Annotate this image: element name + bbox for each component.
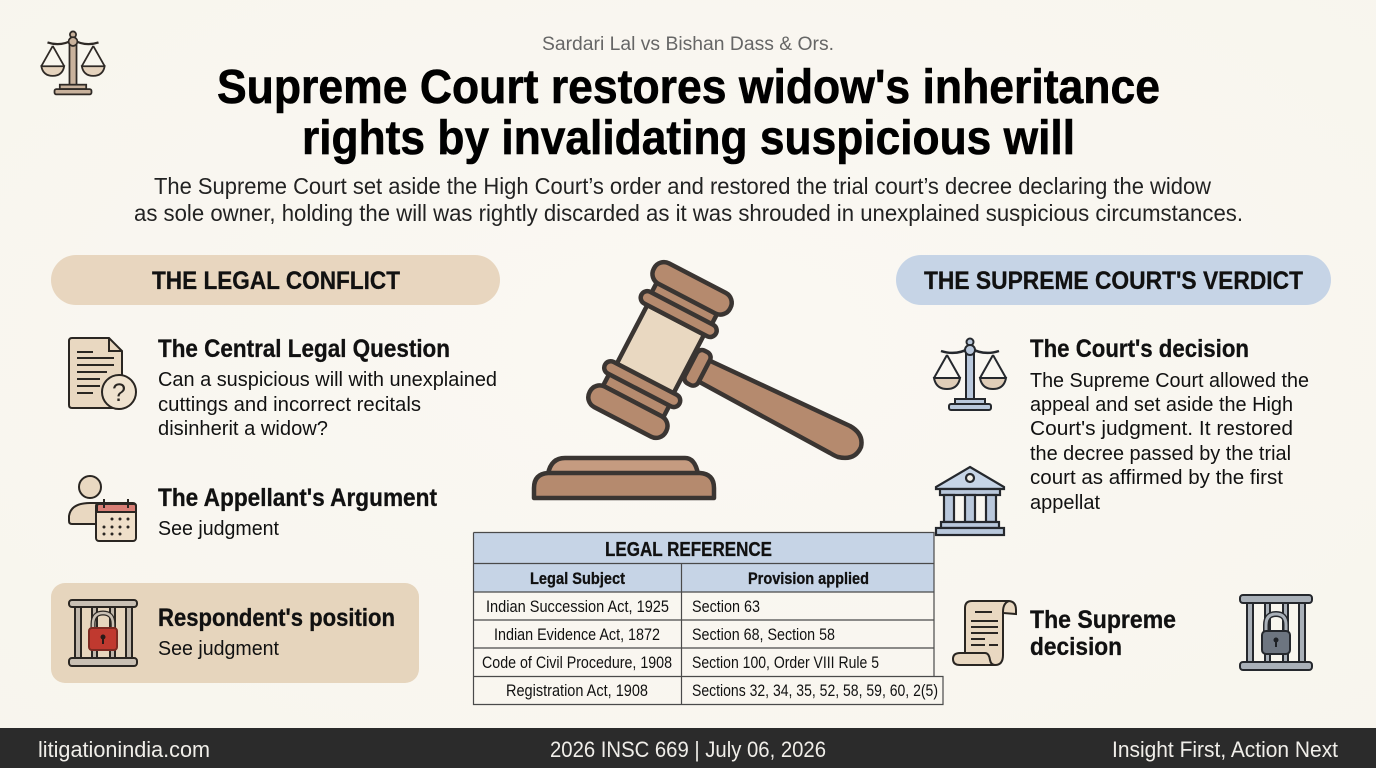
text: the supreme decision: The Supreme [1030, 606, 1176, 634]
table: legal reference [473, 532, 943, 704]
table: legal reference: Section 68, Section 58 [692, 625, 835, 644]
icon: person with calendar [69, 476, 136, 541]
panel: the legal conflict heading: THE LEGAL CONFLICT [152, 267, 400, 295]
text: the appellant's argument: The Appellant's Argument [158, 484, 438, 512]
table: legal reference: LEGAL REFERENCE [605, 539, 772, 561]
icon: grey padlock on cell bars [1240, 595, 1312, 670]
panel: the supreme court's verdict heading: THE SUPREME COURT'S VERDICT [924, 267, 1303, 295]
table: legal reference: Indian Evidence Act, 1872 [494, 625, 660, 644]
text: the central legal question: Can a suspicious will with unexplained [158, 369, 497, 391]
footer bar [0, 728, 1376, 768]
title [217, 61, 1160, 165]
text: the central legal question: The Central Legal Question [158, 335, 450, 363]
panel: respondent's position: Respondent's position [158, 604, 395, 632]
case name: Sardari Lal vs Bishan Dass & Ors. [542, 34, 834, 55]
text: the appellant's argument: See judgment [158, 518, 279, 540]
icon: scales of justice (header) [41, 31, 105, 94]
text: the supreme decision [1030, 606, 1176, 661]
icon: document with question mark: ? [112, 379, 126, 407]
text: the court's decision: court as affirmed by the first [1030, 467, 1283, 489]
table: legal reference: Sections 32, 34, 35, 52, 58, 59, 60, 2(5) [692, 681, 938, 700]
sound block [548, 458, 698, 474]
text: the central legal question: cuttings and incorrect recitals [158, 394, 421, 416]
panel: the supreme court's verdict heading [896, 255, 1331, 305]
summary text: The Supreme Court set aside the High Court’s order and restored the trial court’s decree declaring the widow [154, 173, 1211, 199]
table: legal reference: Section 100, Order VIII Rule 5 [692, 653, 879, 672]
text: the central legal question [158, 335, 497, 440]
icon: document with question mark [69, 338, 136, 409]
summary text: as sole owner, holding the will was rightly discarded as it was shrouded in unexplained suspicious circumstances. [134, 200, 1243, 226]
text: the court's decision: appeal and set aside the High [1030, 394, 1293, 416]
text: the court's decision: the decree passed by the trial [1030, 443, 1291, 465]
panel: respondent's position [51, 583, 419, 683]
panel: respondent's position: See judgment [158, 638, 279, 660]
table: legal reference: Registration Act, 1908 [506, 681, 648, 700]
title: rights by invalidating suspicious will [302, 112, 1075, 165]
footer bar: 2026 INSC 669 | July 06, 2026 [550, 737, 826, 762]
text: the court's decision: Court's judgment. It restored [1030, 418, 1293, 440]
text: the supreme decision: decision [1030, 633, 1122, 661]
table: legal reference: Code of Civil Procedure, 1908 [482, 653, 672, 672]
title: Supreme Court restores widow's inheritance [217, 61, 1160, 114]
text: the appellant's argument [158, 484, 438, 540]
footer bar: Insight First, Action Next [1112, 737, 1338, 762]
icon: padlock on cell bars [69, 600, 137, 666]
footer bar: litigationindia.com [38, 737, 210, 762]
text: the court's decision: The Supreme Court allowed the [1030, 370, 1309, 392]
text: the court's decision: The Court's decision [1030, 335, 1249, 363]
summary text [134, 173, 1243, 226]
panel: the legal conflict heading [51, 255, 500, 305]
table: legal reference: Indian Succession Act, 1925 [486, 597, 669, 616]
text: the court's decision: appellat [1030, 492, 1100, 514]
icon: gavel and sound block [534, 258, 862, 498]
text: the court's decision [1030, 335, 1309, 514]
icon: scales of justice (verdict) [934, 338, 1006, 410]
table: legal reference: Legal Subject [530, 569, 625, 588]
text: the central legal question: disinherit a widow? [158, 418, 328, 440]
icon: courthouse [936, 467, 1004, 535]
table: legal reference: Section 63 [692, 597, 760, 616]
table: legal reference: Provision applied [748, 569, 869, 588]
icon: scroll [953, 601, 1016, 665]
gavel handle [694, 358, 862, 458]
gavel head [584, 258, 741, 444]
